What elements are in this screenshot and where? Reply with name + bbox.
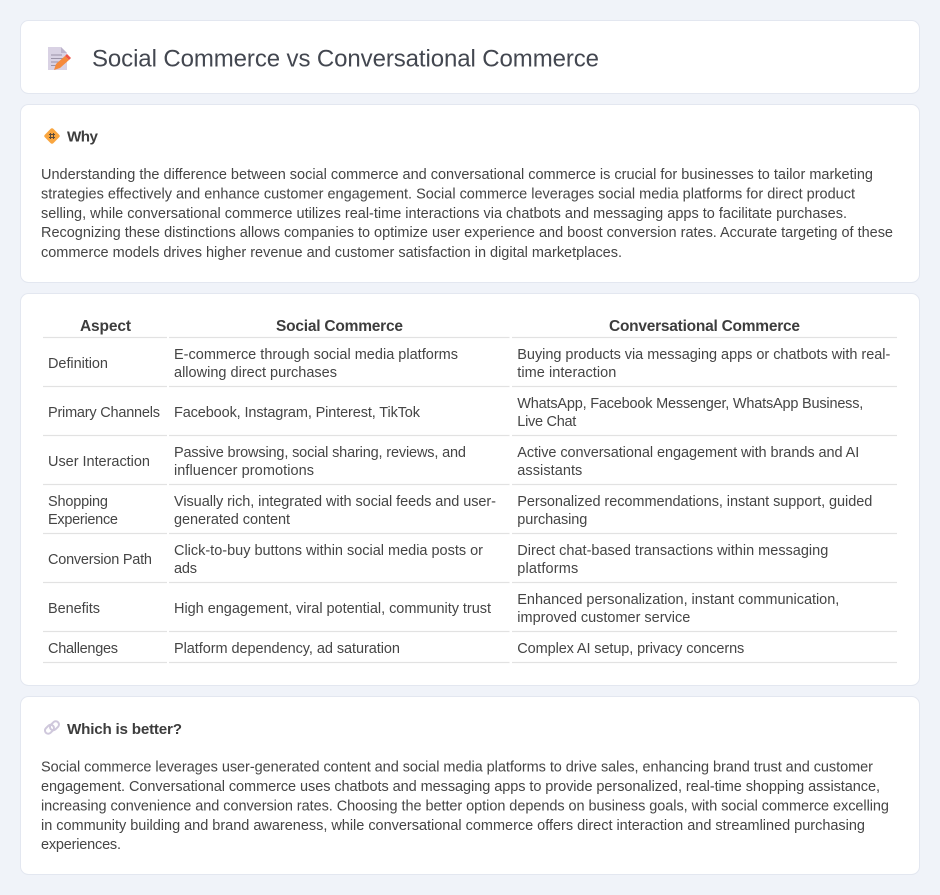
text block: which is better: increasing convenience and conversion rates. Choosing the better option depends on business goals, with social commerce excelling: [41, 798, 889, 814]
row: user interaction: Active conversational engagement with brands and AI: [517, 445, 859, 461]
row: conversion path: [48, 543, 828, 577]
panel: which is better: [20, 696, 920, 874]
row: definition: Buying products via messaging apps or chatbots with real-: [517, 347, 890, 363]
row: conversion path: platforms: [517, 561, 578, 577]
text block: which is better: engagement. Conversational commerce uses chatbots and messaging apps to provide personalized, real-time shopping assistance,: [41, 779, 880, 795]
icon: document with pencil: [48, 47, 71, 70]
row: user interaction: [48, 445, 859, 479]
row: benefits: High engagement, viral potential, community trust: [174, 601, 491, 617]
text block: why: selling, while conversational commerce utilizes real-time interactions via chatbots and messaging apps to facilitate purchases.: [41, 206, 847, 222]
table header: Aspect: [80, 318, 131, 335]
row: shopping experience: Personalized recommendations, instant support, guided: [517, 494, 872, 510]
row: user interaction: influencer promotions: [174, 463, 314, 479]
text block: why: [41, 167, 893, 261]
row: shopping experience: purchasing: [517, 512, 587, 528]
text block: which is better: in community building and brand awareness, while conversational commerce offers direct interaction and streamlined purchasing: [41, 818, 865, 834]
row: benefits: Enhanced personalization, instant communication,: [517, 592, 839, 608]
row: benefits: Benefits: [48, 601, 100, 617]
heading: why: Why: [67, 128, 99, 146]
panel: header: [20, 20, 920, 94]
row: user interaction: assistants: [517, 463, 582, 479]
row: benefits: [48, 592, 839, 626]
text block: why: Recognizing these distinctions allows companies to optimize user experience and boost conversion rates. Accurate targeting of these: [41, 225, 893, 241]
row: challenges: Challenges: [48, 641, 118, 657]
icon: diamond sign: [44, 128, 60, 144]
row: challenges: Complex AI setup, privacy concerns: [517, 641, 744, 657]
row: challenges: Platform dependency, ad saturation: [174, 641, 400, 657]
row: definition: Definition: [48, 356, 108, 372]
row: shopping experience: Shopping: [48, 494, 108, 510]
row: primary channels: Facebook, Instagram, Pinterest, TikTok: [174, 405, 421, 421]
row: definition: time interaction: [517, 365, 616, 381]
table header: Conversational Commerce: [609, 318, 800, 335]
text block: which is better: Social commerce leverages user-generated content and social media platforms to drive sales, enhancing brand trust and customer: [41, 760, 873, 776]
row: shopping experience: Experience: [48, 512, 118, 528]
row: definition: allowing direct purchases: [174, 365, 337, 381]
text block: which is better: experiences.: [41, 837, 121, 853]
row: conversion path: Direct chat-based transactions within messaging: [517, 543, 828, 559]
row: primary channels: Primary Channels: [48, 405, 160, 421]
row: user interaction: User Interaction: [48, 454, 150, 470]
row: definition: E-commerce through social media platforms: [174, 347, 458, 363]
row: primary channels: [48, 396, 863, 430]
heading: which is better: Which is better?: [67, 721, 182, 738]
row: primary channels: Live Chat: [517, 414, 576, 430]
row: primary channels: WhatsApp, Facebook Messenger, WhatsApp Business,: [517, 396, 863, 412]
text block: why: strategies effectively and enhance customer engagement. Social commerce leverages social media platforms for direct product: [41, 186, 855, 202]
title: Social Commerce vs Conversational Commerce: [92, 46, 599, 72]
row: user interaction: Passive browsing, social sharing, reviews, and: [174, 445, 466, 461]
row: conversion path: ads: [174, 561, 197, 577]
table header: [80, 318, 800, 335]
row: definition: [48, 347, 890, 381]
row: conversion path: Conversion Path: [48, 552, 152, 568]
row: conversion path: Click-to-buy buttons within social media posts or: [174, 543, 483, 559]
row: shopping experience: [48, 494, 872, 528]
text block: why: Understanding the difference between social commerce and conversational commerce is crucial for businesses to tailor marketing: [41, 167, 873, 183]
panel: comparison table: [20, 294, 920, 686]
text block: why: commerce models drives higher revenue and customer satisfaction in digital marketplaces.: [41, 245, 622, 261]
text block: which is better: [41, 760, 889, 853]
row: benefits: improved customer service: [517, 610, 690, 626]
row: shopping experience: Visually rich, integrated with social feeds and user-: [174, 494, 496, 510]
row: challenges: [48, 641, 744, 657]
panel: why: [20, 104, 920, 282]
icon: link: [44, 720, 60, 735]
row: shopping experience: generated content: [174, 512, 290, 528]
table header: Social Commerce: [276, 318, 403, 335]
